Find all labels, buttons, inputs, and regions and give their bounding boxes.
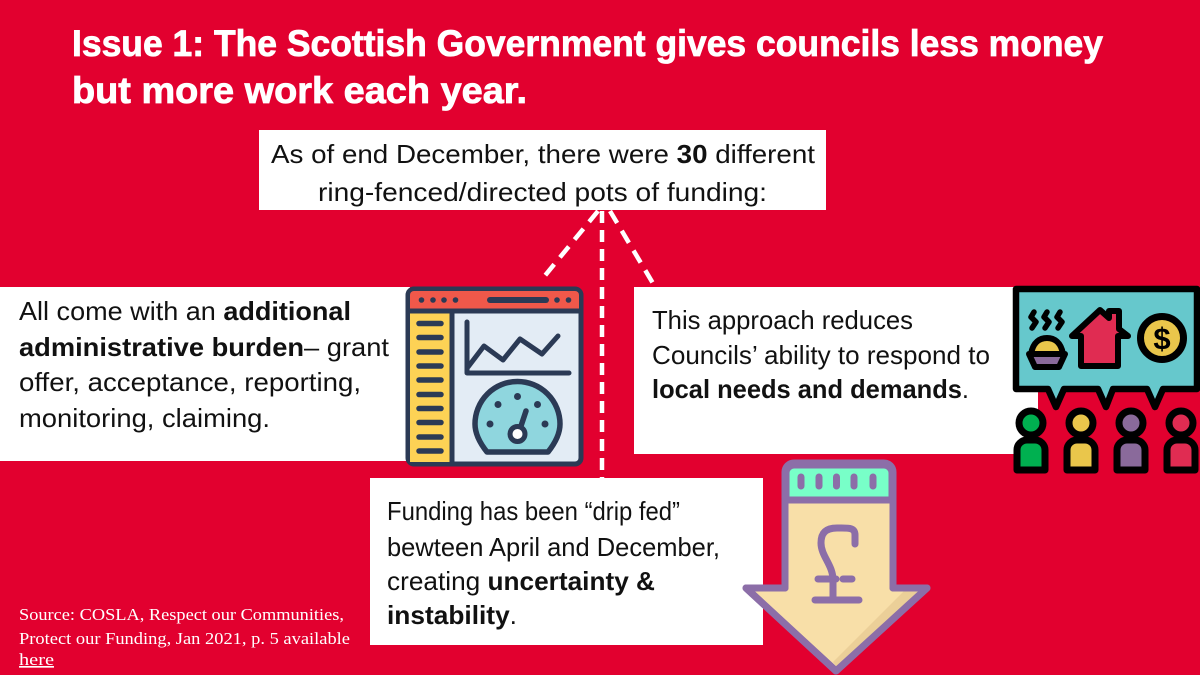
panel: drip fed: Funding has been “drip fed”	[387, 496, 680, 526]
source note	[19, 605, 350, 669]
icon: people	[1017, 411, 1195, 470]
panel: administrative burden: administrative burden – grant	[19, 332, 390, 362]
panel: local needs: Councils’ ability to respond to	[652, 340, 990, 370]
source note: Source: COSLA, Respect our Communities,	[19, 605, 344, 624]
panel: administrative burden: monitoring, claiming.	[19, 403, 270, 433]
icon: community speech bubble: $	[1153, 321, 1171, 356]
panel: administrative burden	[0, 287, 410, 461]
panel: administrative burden: offer, acceptance, reporting,	[19, 367, 361, 397]
panel: drip fed: instability.	[387, 600, 517, 630]
source note: here	[19, 650, 54, 669]
title	[72, 23, 1103, 111]
icon: pound down arrow	[746, 463, 927, 671]
icon: food bowl	[1031, 338, 1063, 354]
icon: dollar coin	[1140, 316, 1184, 360]
panel: pots of funding	[259, 130, 826, 210]
title: Issue 1: The Scottish Government gives councils less money	[72, 23, 1103, 64]
panel: drip fed	[370, 478, 763, 645]
panel: local needs	[634, 287, 1038, 454]
icon: steam	[1031, 312, 1062, 328]
panel: drip fed: bewteen April and December,	[387, 532, 720, 562]
icon: dashboard	[408, 289, 581, 464]
icon: community speech bubble	[1016, 289, 1197, 470]
panel: pots of funding: As of end December, there were 30 different	[271, 139, 816, 169]
panel: pots of funding: ring-fenced/directed pots of funding:	[318, 177, 767, 207]
icon: house	[1072, 310, 1128, 366]
panel: administrative burden: All come with an additional	[19, 296, 351, 326]
source note: Protect our Funding, Jan 2021, p. 5 available	[19, 629, 350, 648]
connector: dashed lines	[543, 211, 654, 480]
panel: local needs: local needs and demands.	[652, 374, 969, 404]
panel: local needs: This approach reduces	[652, 305, 913, 335]
panel: drip fed: creating uncertainty &	[387, 566, 655, 596]
title: but more work each year.	[72, 70, 527, 111]
